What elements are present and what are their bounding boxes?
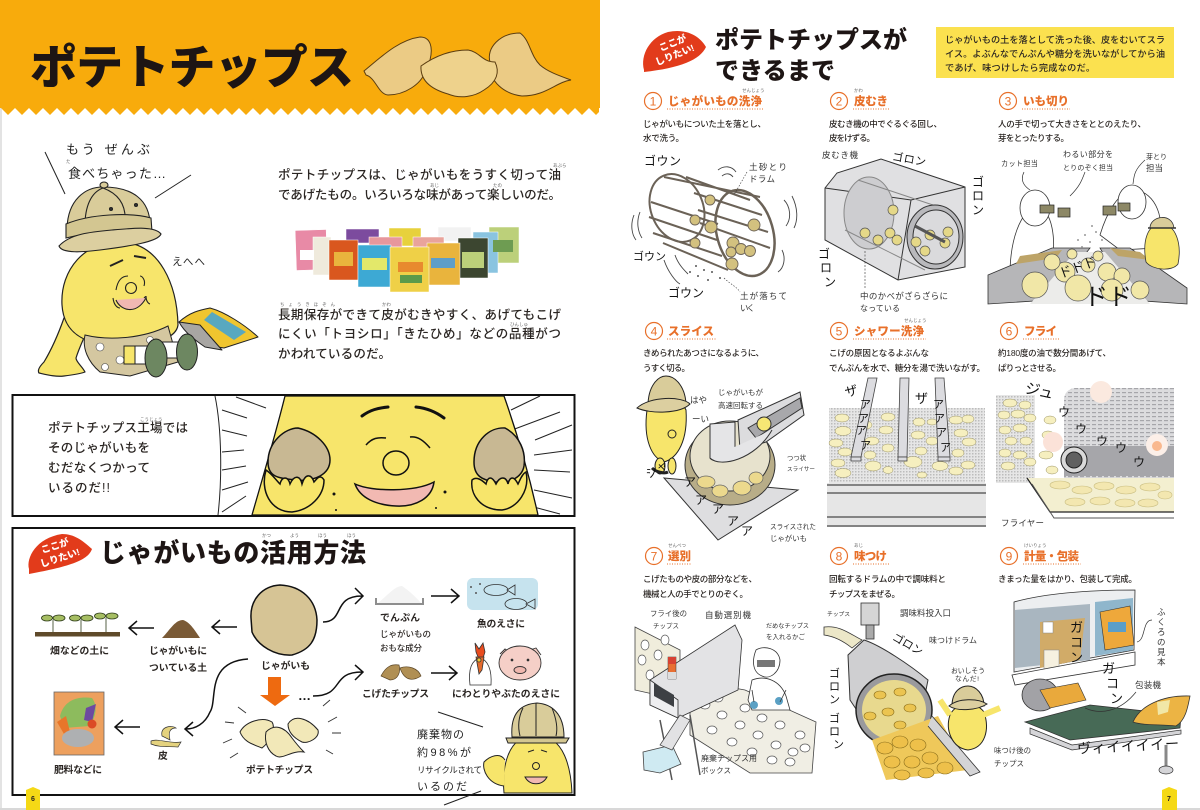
step 1 text xyxy=(643,119,766,143)
left page edge xyxy=(0,0,2,810)
step 1 heading: じゃがいもの洗浄 xyxy=(668,94,762,108)
packing labels: ろ xyxy=(1157,627,1166,637)
sound text 2: ロ xyxy=(972,189,984,203)
page tab: 6: 6 xyxy=(31,796,35,803)
illustration: rinse conveyor xyxy=(827,378,986,527)
sound text 5: ザ xyxy=(843,382,860,400)
sound text 4 xyxy=(643,457,753,538)
sound text 2: ゴロン xyxy=(891,149,927,169)
heading: ほう xyxy=(318,533,327,539)
step 8 heading xyxy=(830,543,890,564)
step 8 heading: 味つけ xyxy=(854,549,887,563)
arrow: chips to burnt chips xyxy=(313,665,363,696)
drum labels: いく xyxy=(740,303,755,313)
label: potato: じゃがいも xyxy=(261,659,310,672)
step 5: shower rinse xyxy=(827,318,986,527)
left potato and hand xyxy=(264,428,330,512)
title: ポテトチップス xyxy=(30,41,354,94)
label: chicken and pig feed: にわとりやぶたのえさに xyxy=(452,688,560,700)
icon: potato xyxy=(251,585,317,655)
drum labels: 土が落ちて xyxy=(740,291,787,301)
shorts xyxy=(84,326,178,376)
worker labels: とりのぞく担当 xyxy=(1063,163,1113,172)
arrow: burnt chips to livestock xyxy=(431,666,457,680)
page tab: 6 xyxy=(26,787,40,810)
worker labels: わるい部分を xyxy=(1063,150,1113,159)
eyebrows xyxy=(362,407,444,418)
worker labels: 芽とり xyxy=(1146,152,1167,161)
packing labels: く xyxy=(1157,617,1166,627)
label: soil on potatoes: じゃがいもに xyxy=(149,644,207,657)
sound text 8: ン xyxy=(829,694,840,706)
step 2 text xyxy=(829,119,942,143)
step 6 heading: フライ xyxy=(1024,325,1057,338)
sound text 9: ヴィイイイイー xyxy=(1077,735,1179,757)
badge: want to know (right page): ここが xyxy=(657,32,689,54)
step 3 heading: 3 xyxy=(1005,94,1012,108)
step 9 heading: 計量・包装 xyxy=(1024,549,1080,563)
drum labels xyxy=(724,162,787,313)
comic text: こうじょう xyxy=(140,417,162,423)
text block: potato varieties xyxy=(278,301,561,361)
step 7 heading: せんべつ xyxy=(668,543,686,549)
arm and hand xyxy=(38,318,90,376)
label: soil on potatoes: ついている土 xyxy=(149,661,207,674)
sound text 5: ア xyxy=(936,427,947,439)
worker labels: 担当 xyxy=(1146,163,1163,173)
heading: よう xyxy=(290,533,299,539)
step 2 text: 皮むき機の中でぐるぐる回し、 xyxy=(829,119,942,129)
comic text: そのじゃがいもを xyxy=(48,440,150,455)
text block: potato varieties: ちょうきほぞん xyxy=(280,301,336,308)
icon: soil pile xyxy=(162,620,200,638)
panel: intro mascot sitting xyxy=(38,142,258,377)
sound text 2: ゴ xyxy=(818,246,830,261)
seasoning labels: チップス xyxy=(827,611,850,618)
sound text 5 xyxy=(843,382,951,454)
comic text xyxy=(48,417,188,495)
sound text 6: ウ xyxy=(1133,455,1145,469)
slicer labels: つつ状 xyxy=(787,453,807,462)
step 8 heading: あじ xyxy=(854,543,863,549)
sorting labels: だめなチップス xyxy=(766,623,809,630)
badge: want to know (right page) xyxy=(643,31,706,72)
step 9 heading: けいりょう xyxy=(1024,543,1046,549)
sound text 5: ザ xyxy=(915,391,928,406)
packing labels: の xyxy=(1157,637,1166,647)
seasoning labels: 調味料投入口 xyxy=(900,608,951,618)
step 5 heading: 5 xyxy=(836,324,843,338)
page tab: 7 xyxy=(1162,787,1177,810)
step 4: slicing xyxy=(637,322,816,543)
hat xyxy=(59,182,161,252)
drum labels: ドラム xyxy=(749,174,775,184)
sound text 8: ロ xyxy=(829,726,840,738)
packing labels: 見 xyxy=(1157,647,1166,657)
step 6 heading: 6 xyxy=(1006,324,1013,338)
step 9 heading xyxy=(1000,543,1081,564)
sound text 6 xyxy=(1023,380,1145,469)
legs and shoes xyxy=(124,334,198,377)
arrow: potato to chips xyxy=(260,677,290,706)
step 8 heading: 8 xyxy=(836,550,843,564)
arrow: potato to peel xyxy=(185,659,248,736)
label: starch: じゃがいもの xyxy=(380,629,431,639)
step 6 heading xyxy=(1000,322,1060,340)
sound text 2: ゴ xyxy=(972,174,984,189)
sound text 4: ア xyxy=(727,514,739,528)
seasoning labels xyxy=(827,608,1031,768)
step 4 text: うすく切る。 xyxy=(643,363,690,373)
sound text 4: ア xyxy=(741,524,753,538)
sound text 3: ドド xyxy=(1084,284,1132,311)
sound text 1: ゴウン xyxy=(633,249,666,263)
giant mascot face xyxy=(252,396,538,515)
slicer labels: ーい xyxy=(692,414,709,424)
icon: potato chips burst xyxy=(223,700,341,758)
step 4 text xyxy=(643,348,764,373)
step 2 heading: かわ xyxy=(854,87,863,94)
step 7 text: 機械と人の手でとりのぞく。 xyxy=(643,589,748,599)
peeler labels: 皮むき機 xyxy=(822,150,858,160)
summary box: であげ、味つけしたら完成なのだ。 xyxy=(945,62,1095,73)
step 6 text: 約180度の油で数分間あげて、 xyxy=(998,348,1111,358)
bottom page edge xyxy=(0,808,1200,810)
sound text 1: ゴウン xyxy=(644,153,681,168)
label: field soil: 畑などの土に xyxy=(50,644,109,657)
sound text 9: ガ xyxy=(1070,620,1083,635)
step 1 heading xyxy=(644,88,764,110)
label: potato chips: ポテトチップス xyxy=(246,764,313,776)
illustration: seasoning drum xyxy=(824,603,980,780)
step 2 text: 皮をけずる。 xyxy=(829,133,875,143)
handwritten note: 98% recycled: いるのだ xyxy=(417,780,467,793)
sound text 6: ウ xyxy=(1115,441,1127,455)
step 1 heading: せんじょう xyxy=(742,88,764,94)
step 4 text: きめられたあつさになるように、 xyxy=(643,348,764,358)
sorting labels: チップス xyxy=(653,622,679,630)
step 3 text xyxy=(998,119,1146,143)
illustration: slicer machine xyxy=(664,392,804,540)
handwritten note: 98% recycled: 約98%が xyxy=(417,745,471,759)
arrow: starch to fish xyxy=(431,589,459,603)
step 5 heading xyxy=(830,318,926,340)
step 2 heading: 皮むき xyxy=(854,94,888,108)
peeler labels xyxy=(822,150,948,313)
sound text 8: ゴロン xyxy=(890,630,926,658)
speech lines xyxy=(438,712,483,805)
label: fish feed: 魚のえさに xyxy=(477,617,525,630)
arrow: soil to field xyxy=(129,621,154,635)
illustration: peeling machine xyxy=(825,159,965,280)
sound text 5: ア xyxy=(933,399,944,411)
sound text 2: ン xyxy=(824,275,836,289)
handwritten note: 98% recycled xyxy=(417,727,482,793)
text block: what chips are: であげたもの。いろいろな味があって楽しいのだ。 xyxy=(278,187,561,202)
step 1 text: 水で洗う。 xyxy=(643,133,684,143)
page tab: 7: 7 xyxy=(1167,796,1171,803)
step 1: washing xyxy=(632,88,797,313)
label: peel: 皮 xyxy=(158,749,168,762)
face xyxy=(110,256,150,310)
icon: fertilizer bag xyxy=(54,692,104,755)
step 7 heading: 7 xyxy=(651,550,658,564)
label: starch xyxy=(380,612,431,653)
smile xyxy=(355,482,434,506)
text block: potato varieties: 長期保存ができて皮がむきやすく、あげてもこげ xyxy=(278,307,561,322)
sound text 2 xyxy=(818,149,984,289)
sound text 4: ア xyxy=(712,502,724,516)
text block: what chips are: あじ xyxy=(430,183,439,189)
mascot with slicer xyxy=(637,376,690,474)
sound text 6: ウ xyxy=(1096,434,1108,448)
step 5 text: でんぷんを水で、糖分を湯で洗いながす。 xyxy=(829,363,985,373)
text block: potato varieties: かわ xyxy=(382,301,391,308)
label: starch: でんぷん xyxy=(380,612,420,624)
icon: burnt chips xyxy=(381,665,421,680)
step 7 heading: 選別 xyxy=(668,550,691,563)
sound text 5: ア xyxy=(856,425,867,437)
step 8 text: 回転するドラムの中で調味料と xyxy=(829,574,946,584)
summary box: イス。よぶんなでんぷんや糖分を洗いながしてから油 xyxy=(945,48,1165,59)
peeler labels: 中のかべがざらざらに xyxy=(860,291,948,301)
text block: what chips are: あぶら xyxy=(553,163,566,169)
heading: how chips are made xyxy=(715,26,907,85)
sound text 5: ア xyxy=(934,413,945,425)
step 3 heading xyxy=(1000,92,1070,110)
sound text 2: ロ xyxy=(820,261,832,275)
step 9: weighing and packing xyxy=(998,543,1190,774)
seasoning labels: 味つけドラム xyxy=(929,635,977,645)
comic text: むだなくつかって xyxy=(48,461,150,475)
step 4 heading: スライス xyxy=(668,325,714,338)
speech lines xyxy=(45,152,191,198)
step 3 text: 芽をとったりする。 xyxy=(998,133,1069,143)
illustration: fryer xyxy=(996,381,1174,518)
illustration: packing machine xyxy=(1012,590,1190,774)
step 6 text xyxy=(998,348,1111,373)
step 9 heading: 9 xyxy=(1006,550,1013,564)
handwritten note: 98% recycled: リサイクルされて xyxy=(417,765,482,775)
illustration: workers and conveyor xyxy=(988,185,1187,304)
packing labels: ふ xyxy=(1157,607,1166,617)
sound text 8: ゴ xyxy=(829,666,840,680)
sound text 4: ア xyxy=(695,493,707,507)
sound text 8: ロ xyxy=(829,681,840,693)
step 4 heading: 4 xyxy=(651,324,658,338)
step 1 text: じゃがいもについた土を落とし、 xyxy=(643,119,766,129)
step 9 text: きまった量をはかり、包装して完成。 xyxy=(998,574,1137,584)
heading: how chips are made: ポテトチップスが xyxy=(715,26,907,54)
sorting labels: 自動選別機 xyxy=(705,610,751,620)
step 4 heading xyxy=(646,322,716,340)
sound text 9: ン xyxy=(1070,650,1083,665)
step 3 heading: いも切り xyxy=(1023,95,1069,108)
step 6 text: ぱりっとさせる。 xyxy=(998,363,1061,373)
step 3 text: 人の手で切って大きさをととのえたり、 xyxy=(998,119,1146,129)
label: burnt chips: こげたチップス xyxy=(362,687,429,700)
text block: potato varieties: にくい「トヨシロ」「きたひめ」などの品種がつ xyxy=(278,326,561,341)
slicer labels: スライスされた xyxy=(770,523,816,531)
cheek dots xyxy=(332,490,446,511)
badge: want to know (right page): しりたい! xyxy=(654,43,696,68)
sorting labels: ボックス xyxy=(701,766,731,775)
step 2 heading: 2 xyxy=(836,94,843,108)
summary box xyxy=(936,27,1174,78)
step 5 heading: せんじょう xyxy=(904,318,926,324)
step 7 text xyxy=(643,574,757,599)
sound text 1 xyxy=(633,153,704,300)
sound text 9 xyxy=(1070,620,1179,757)
step 5 text xyxy=(829,348,985,373)
shorts spots xyxy=(96,336,154,370)
text block: potato varieties: ひんしゅ xyxy=(510,322,528,328)
step 7: sorting xyxy=(635,543,816,780)
text block: what chips are: たの xyxy=(493,183,502,189)
heading: じゃがいもの活用方法 xyxy=(100,538,366,568)
panel: comic - factory uses every potato xyxy=(12,395,574,516)
illustration: rotating drum xyxy=(632,166,797,284)
step 7 text: こげたものや皮の部分などを、 xyxy=(643,574,757,584)
sound text 3: ドドド xyxy=(1057,254,1099,281)
slicer labels xyxy=(690,387,816,543)
packing labels: 本 xyxy=(1157,657,1166,667)
step 3: cutting xyxy=(988,92,1187,311)
comic text: ポテトチップス工場では xyxy=(48,420,188,435)
step 8: seasoning xyxy=(824,543,1031,780)
panel: ways to use potatoes xyxy=(12,528,574,805)
slicer labels: じゃがいもが xyxy=(718,387,764,397)
peeler labels: なっている xyxy=(860,304,900,313)
sound text 8: ン xyxy=(833,739,844,751)
speech text: もう ぜんぶ xyxy=(66,142,150,157)
step 6: frying xyxy=(996,322,1174,528)
label: soil on potatoes xyxy=(149,644,207,674)
packing labels xyxy=(1085,607,1166,711)
step 1 heading: 1 xyxy=(650,94,657,108)
seasoning labels: おいしそう xyxy=(951,667,985,675)
speech text: た xyxy=(66,159,71,165)
label: fryer: フライヤー xyxy=(1001,518,1044,528)
sound text 2: ン xyxy=(972,203,984,217)
emphasis lines xyxy=(215,396,572,515)
handwritten note: 98% recycled: 廃棄物の xyxy=(417,727,464,741)
speech text: 食べちゃった… xyxy=(68,166,166,181)
sound text 5: ア xyxy=(858,413,869,425)
sound text 9: ガ xyxy=(1102,661,1115,676)
step 2: peeling xyxy=(818,87,984,313)
heading: ほう xyxy=(347,533,356,539)
sound text 6: ジュ xyxy=(1023,380,1055,403)
right potato and hand xyxy=(472,428,527,510)
icon: sprouts xyxy=(35,613,120,636)
sound text 9: ン xyxy=(1110,691,1123,706)
small mascot xyxy=(484,703,572,793)
sound text 6: ウ xyxy=(1058,405,1070,419)
sound text 3 xyxy=(1057,254,1132,311)
body xyxy=(62,242,178,345)
sorting labels: を入れるかご xyxy=(766,632,806,641)
seasoning labels: なんだ! xyxy=(955,675,979,683)
sound text 4: シャ xyxy=(643,457,671,481)
sound text 9: コ xyxy=(1070,635,1083,650)
speech text xyxy=(66,142,166,181)
sound text 8 xyxy=(829,630,926,751)
slicer labels: スライサー xyxy=(787,466,815,473)
heading: how chips are made: できるまで xyxy=(715,58,835,85)
dots: … xyxy=(298,688,311,703)
icon: peel xyxy=(151,727,181,747)
sound text 9: コ xyxy=(1106,676,1119,691)
reaction text: えへへ xyxy=(172,256,205,268)
icon: rooster xyxy=(469,643,491,685)
label: starch: おもな成分 xyxy=(380,643,422,653)
comic text: いるのだ!! xyxy=(48,481,110,495)
text block: what chips are: ポテトチップスは、じゃがいもをうすく切って油 xyxy=(278,167,561,182)
sound text 6: ウ xyxy=(1075,422,1087,436)
sound text 5: ア xyxy=(860,440,871,452)
badge: want to know xyxy=(28,534,92,574)
illustration: sorting machine xyxy=(635,625,816,780)
arrow: potato to starch xyxy=(323,588,363,622)
slicer labels: 高速回転する xyxy=(718,400,763,410)
sound text 5: ア xyxy=(940,442,951,454)
badge: want to know: しりたい! xyxy=(39,547,82,570)
text block: what chips are xyxy=(278,163,566,202)
seasoning labels: 味つけ後の xyxy=(994,746,1031,755)
header band: title and chips xyxy=(0,0,600,115)
drum labels: 土砂とり xyxy=(749,162,787,172)
arrow: potato to soil xyxy=(212,620,237,634)
step 7 heading xyxy=(646,543,692,564)
sound text 1: ゴウン xyxy=(668,285,704,300)
icon: fish in water xyxy=(467,578,538,610)
badge: want to know: ここが xyxy=(40,536,71,556)
step 5 heading: シャワー洗浄 xyxy=(854,324,924,338)
chip bag behind mascot xyxy=(179,308,258,350)
worker labels xyxy=(1001,150,1167,196)
step 8 text: チップスをまぜる。 xyxy=(829,589,900,599)
icon: pig xyxy=(499,646,541,680)
packing labels: 包装機 xyxy=(1135,680,1161,690)
step 2 heading xyxy=(830,87,889,110)
icon: three potato chips xyxy=(364,33,571,97)
step 8 text xyxy=(829,574,946,599)
sorting labels xyxy=(650,609,809,775)
sound text 4: ア xyxy=(684,475,696,489)
label: fertilizer: 肥料などに xyxy=(54,763,102,776)
sound text 8: ゴ xyxy=(829,711,840,725)
summary box: じゃがいもの土を落として洗った後、皮をむいてスラ xyxy=(945,34,1165,45)
heading: かつ xyxy=(262,532,271,539)
seasoning labels: チップス xyxy=(994,759,1024,768)
slicer labels: はや xyxy=(690,395,707,405)
sorting labels: フライ後の xyxy=(650,609,687,618)
arrow: peel to fertilizer xyxy=(115,720,140,734)
text block: potato varieties: かわれているのだ。 xyxy=(278,347,391,361)
step 5 text: こげの原因となるよぶんな xyxy=(829,348,929,358)
worker labels: カット担当 xyxy=(1001,159,1038,168)
slicer labels: じゃがいも xyxy=(770,534,807,543)
sorting labels: 廃棄チップス用 xyxy=(701,753,757,763)
mascot cheering xyxy=(940,686,1000,750)
icon: assorted chip bags xyxy=(295,227,519,292)
icon: starch pile xyxy=(376,586,423,604)
sound text 5: ア xyxy=(860,399,871,411)
nose and eye curves xyxy=(366,437,430,475)
